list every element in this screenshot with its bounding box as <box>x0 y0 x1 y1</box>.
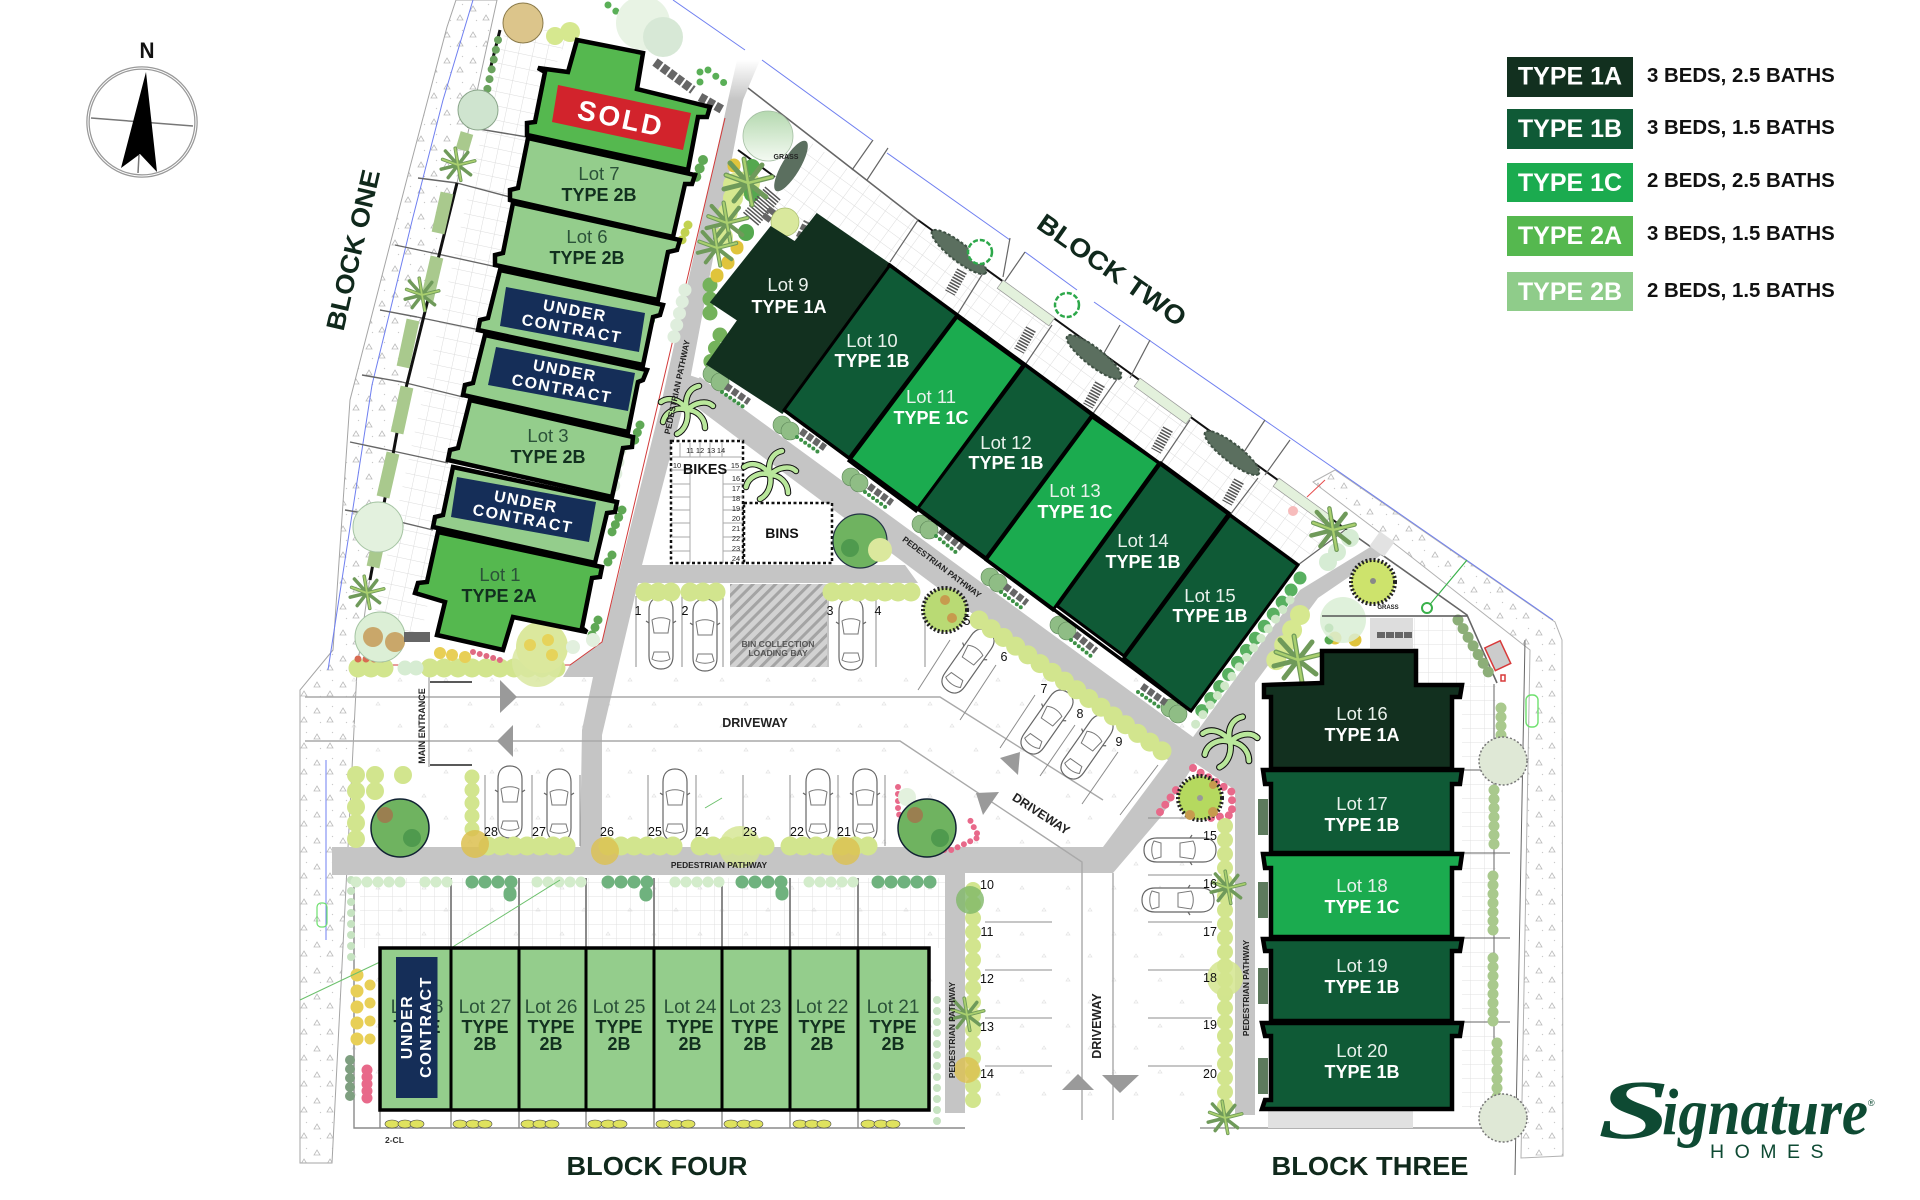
parking numbers: 12 <box>980 972 994 986</box>
pathway and driveway labels: DRIVEWAY <box>722 716 788 730</box>
parking numbers: 7 <box>1041 682 1048 696</box>
parking numbers: 28 <box>484 825 498 839</box>
parking numbers: 24 <box>695 825 709 839</box>
lot 16 <box>1264 651 1462 769</box>
lot 14 <box>1057 463 1229 656</box>
under contract badge: lot 5 <box>500 287 645 352</box>
logo: Signature Homes: ignature <box>1662 1076 1868 1149</box>
pedestrian pathway: connector to block two <box>672 372 704 398</box>
lot labels: block two: TYPE 1C <box>893 408 969 428</box>
lot labels: block four: TYPE <box>461 1017 509 1037</box>
lot labels: block four: 2B <box>743 1034 767 1054</box>
legend: type 2B: TYPE 2B <box>1518 278 1622 306</box>
parking numbers: 27 <box>532 825 546 839</box>
legend: type 1B: 3 BEDS, 1.5 BATHS <box>1647 117 1835 139</box>
pathway and driveway labels: DRIVEWAY <box>1090 993 1104 1059</box>
bin collection loading bay <box>730 584 827 667</box>
block three lots <box>1262 651 1462 1109</box>
pathway and driveway labels: GRASS <box>774 154 799 161</box>
under contract badge: lot 5: UNDER <box>542 297 608 326</box>
lot 9 <box>708 215 888 412</box>
logo: Signature Homes: S <box>1598 1064 1670 1157</box>
block two north wall to path <box>738 150 775 177</box>
legend <box>1507 57 1835 311</box>
parking numbers: 22 <box>790 825 804 839</box>
bikes enclosure: 21 <box>732 524 740 533</box>
lot labels: block two: TYPE 1B <box>834 351 910 371</box>
parking numbers: 10 <box>980 878 994 892</box>
bikes enclosure: 15 <box>731 461 739 470</box>
triangle garden pink border <box>1160 768 1232 818</box>
parking numbers: 25 <box>648 825 662 839</box>
bikes enclosure: 13 <box>707 446 715 455</box>
lot labels: block four <box>391 997 919 1054</box>
lot labels: block four: Lot 28 <box>391 997 443 1018</box>
bikes enclosure: 10 <box>673 461 681 470</box>
parking numbers: 3 <box>827 604 834 618</box>
legend: type 1A <box>1507 57 1835 97</box>
parking numbers: 21 <box>837 825 851 839</box>
red title boundary <box>388 118 725 665</box>
bikes enclosure <box>671 441 743 563</box>
legend: type 2A <box>1507 216 1835 256</box>
block one planter tiles <box>373 133 467 567</box>
pedestrian pathway top fade <box>728 60 760 100</box>
landscaping: palms <box>350 148 1355 1133</box>
lot labels: block three: Lot 19 <box>1336 955 1388 976</box>
lot 2 <box>433 467 617 563</box>
parking numbers: 16 <box>1203 877 1217 891</box>
pathway and driveway labels: MAIN ENTRANCE <box>417 688 427 764</box>
logo: Signature Homes: HOMES <box>1710 1141 1834 1163</box>
bikes enclosure: BIKES <box>683 462 727 478</box>
lot 8 sold <box>527 40 710 170</box>
pathway and driveway labels: PEDESTRIAN PATHWAY <box>947 982 957 1078</box>
lot labels: block four: TYPE <box>666 1017 714 1037</box>
landscaping: block two pale planters <box>997 280 1331 524</box>
bikes enclosure: 14 <box>717 446 725 455</box>
legend: type 1A: TYPE 1A <box>1518 62 1622 90</box>
block two wall north section <box>748 88 1497 683</box>
parking numbers: 6 <box>1001 650 1008 664</box>
block two yard stairs <box>950 271 1239 503</box>
courtyards: block four <box>360 878 945 948</box>
parking numbers: 17 <box>1203 925 1217 939</box>
lot 6 <box>495 203 680 300</box>
lot labels: block three: Lot 20 <box>1336 1040 1388 1061</box>
lot labels: block one: TYPE 2B <box>549 248 625 268</box>
lot 1 <box>415 532 602 650</box>
lot 19 <box>1263 939 1462 1021</box>
lot labels: block two: Lot 11 <box>906 386 956 407</box>
landscaping: feature trees <box>353 0 1527 1142</box>
pedestrian pathway: block one <box>563 100 918 847</box>
bin collection loading bay: LOADING BAY <box>748 648 808 658</box>
block four lots <box>380 948 929 1110</box>
note 2-CL: 2-CL <box>385 1135 404 1145</box>
legend: type 2B <box>1507 272 1835 311</box>
lot labels: block four: TYPE <box>595 1017 643 1037</box>
lot labels: block three: TYPE 1B <box>1324 1062 1400 1082</box>
lot labels: block four: Lot 21 <box>867 997 919 1018</box>
street verge left: gravel strip <box>300 0 497 1163</box>
parking numbers <box>484 604 1217 1081</box>
landscaping: block four bush strip <box>385 1120 900 1128</box>
parking numbers: 19 <box>1203 1018 1217 1032</box>
lot labels: block one: TYPE 2B <box>510 447 586 467</box>
pathway and driveway labels: PEDESTRIAN PATHWAY <box>901 534 984 600</box>
lot 3 <box>448 400 633 497</box>
lot labels: block one: TYPE 2A <box>461 586 537 606</box>
under contract badge: lot 2: UNDER <box>493 488 559 517</box>
lot labels: block three: TYPE 1B <box>1324 977 1400 997</box>
bins enclosure: BINS <box>765 525 799 541</box>
bin collection loading bay: BIN COLLECTION <box>741 639 815 649</box>
parking numbers: 8 <box>1077 707 1084 721</box>
heading: block one: BLOCK ONE <box>320 167 386 333</box>
legend: type 1C: TYPE 1C <box>1518 169 1622 197</box>
lot labels: block four: 2B <box>678 1034 702 1054</box>
bikes enclosure: 24 <box>732 554 740 563</box>
courtyards: block one <box>368 30 570 640</box>
lot labels: block three: TYPE 1C <box>1324 897 1400 917</box>
lot 13 <box>986 417 1159 610</box>
driveway ground texture <box>340 670 1240 1110</box>
bikes enclosure: 11 <box>686 446 694 455</box>
lot labels: block four: Lot 22 <box>796 997 848 1018</box>
street verge right: gravel strip <box>1313 470 1563 1158</box>
under contract badge: lot 4: UNDER <box>532 357 598 386</box>
lot dividers <box>451 948 858 1110</box>
driveway edges <box>305 697 1113 1120</box>
block one lots <box>415 40 710 650</box>
lot labels: block two: Lot 9 <box>767 274 809 295</box>
block three yard fences <box>1200 640 1525 1175</box>
pathway and driveway labels: PEDESTRIAN PATHWAY <box>662 339 692 435</box>
parking numbers: 4 <box>875 604 882 618</box>
under contract badge: lot 28 <box>396 957 438 1098</box>
small green marker left strip <box>317 903 327 927</box>
bikes enclosure: 17 <box>732 484 740 493</box>
lot labels: block three: TYPE 1A <box>1324 725 1400 745</box>
parking numbers: 13 <box>980 1020 994 1034</box>
landscaping: lot 9 yard bins <box>765 207 808 238</box>
bikes enclosure: 16 <box>732 474 740 483</box>
block two lots <box>708 215 1298 711</box>
parking numbers: 1 <box>635 604 642 618</box>
legend: type 1C <box>1507 163 1835 202</box>
legend: type 1A: 3 BEDS, 2.5 BATHS <box>1647 65 1835 87</box>
lot labels: block four: TYPE <box>731 1017 779 1037</box>
block three south strip <box>1268 1110 1413 1128</box>
lot labels: block four: 2B <box>473 1034 497 1054</box>
lot labels: block four: Lot 24 <box>664 997 717 1018</box>
lot labels: block three: TYPE 1B <box>1324 815 1400 835</box>
landscaping: front bins and planters block two <box>703 365 1187 723</box>
bikes enclosure: 20 <box>732 514 740 523</box>
lot 5 <box>478 270 663 365</box>
lot labels: block two: Lot 15 <box>1184 585 1236 606</box>
bins enclosure <box>744 503 832 563</box>
direction arrows <box>497 680 1139 1093</box>
landscaping: hedge rows <box>350 5 1501 1122</box>
block four yard fences <box>354 878 965 1128</box>
lot labels: block four: TYPE <box>527 1017 575 1037</box>
lot labels: block four: 2B <box>810 1034 834 1054</box>
lot labels: block four: TYPE <box>393 1017 441 1037</box>
block one outer wall <box>370 30 500 580</box>
legend: type 2B: 2 BEDS, 1.5 BATHS <box>1647 280 1835 302</box>
heading: block two: BLOCK TWO <box>1032 208 1192 332</box>
small red markers near block three <box>1485 641 1511 681</box>
site boundary: blue lines <box>326 0 1553 940</box>
legend: type 2A: TYPE 2A <box>1518 222 1622 250</box>
landscaping: lot 9 pale shrubs <box>771 208 799 236</box>
landscaping: block two dark hedges <box>927 224 1264 481</box>
parking numbers: 20 <box>1203 1067 1217 1081</box>
bikes enclosure: 19 <box>732 504 740 513</box>
under contract badge: lot 2 <box>451 477 596 542</box>
under contract badge: lot 28: UNDER <box>399 995 416 1059</box>
under contract badge: lot 28: CONTRACT <box>418 976 435 1078</box>
lot labels: block two <box>751 274 1248 626</box>
lot 17 <box>1263 770 1462 853</box>
under contract badge: lot 5: CONTRACT <box>520 312 623 347</box>
lot 20 <box>1262 1023 1462 1109</box>
lot labels: block three: Lot 16 <box>1336 703 1388 724</box>
parking numbers: 14 <box>980 1067 994 1081</box>
sold badge: SOLD <box>575 94 667 143</box>
compass <box>88 38 196 176</box>
pathway and driveway labels: GRASS <box>1377 605 1399 611</box>
parking numbers: 18 <box>1203 971 1217 985</box>
under contract badge: lot 4 <box>488 347 635 411</box>
pathway and driveway labels: PEDESTRIAN PATHWAY <box>1241 940 1251 1036</box>
bikes enclosure: 18 <box>732 494 740 503</box>
lot labels: block one: Lot 6 <box>566 226 608 247</box>
parking numbers: 15 <box>1203 829 1217 843</box>
block one yard fences <box>345 127 527 530</box>
pathway and driveway labels: DRIVEWAY <box>1010 790 1073 838</box>
small green marker right strip <box>1526 695 1538 727</box>
legend: type 1B <box>1507 109 1835 149</box>
lot labels: block four: Lot 25 <box>593 997 645 1018</box>
lot labels: block two: Lot 14 <box>1117 530 1169 551</box>
lot labels: block one: TYPE 2B <box>561 185 637 205</box>
lot 18 <box>1263 854 1462 937</box>
lot labels: block four: Lot 23 <box>729 997 781 1018</box>
pedestrian pathway: block two, block three and block four loop <box>332 377 1384 1115</box>
logo: Signature Homes: ® <box>1868 1098 1875 1108</box>
lot labels: block one: Lot 1 <box>479 564 521 585</box>
lot labels: block two: Lot 10 <box>846 330 898 351</box>
bikes enclosure: 22 <box>732 534 740 543</box>
island garden pink border: east <box>898 787 979 850</box>
lot labels: block two: TYPE 1B <box>968 453 1044 473</box>
parking numbers: 26 <box>600 825 614 839</box>
logo: Signature Homes <box>1598 1064 1875 1163</box>
under contract badge: lot 4: CONTRACT <box>510 372 613 407</box>
landscaping: block two stairs by lot 9 <box>750 193 773 220</box>
courtyards: block two <box>775 138 1343 565</box>
lot labels: block four: 2B <box>607 1034 631 1054</box>
lot labels: block one: Lot 3 <box>527 425 569 446</box>
parking numbers: 23 <box>743 825 757 839</box>
courtyards: block three north <box>1413 618 1493 683</box>
block three west strip bins <box>1258 799 1268 1094</box>
lot 15 <box>1124 515 1298 711</box>
lot labels: block two: Lot 13 <box>1049 480 1101 501</box>
legend: type 1C: 2 BEDS, 2.5 BATHS <box>1647 170 1835 192</box>
lot 7 <box>510 138 695 237</box>
lot 12 <box>918 365 1092 558</box>
lot labels: block two: TYPE 1B <box>1105 552 1181 572</box>
sold badge <box>552 85 691 150</box>
lot labels: block two: TYPE 1A <box>751 297 827 317</box>
block two yard fences <box>852 140 1345 565</box>
parking numbers: 2 <box>682 604 689 618</box>
lot labels: block four: Lot 27 <box>459 997 511 1018</box>
parking numbers: 9 <box>1116 735 1123 749</box>
bikes enclosure: 23 <box>732 544 740 553</box>
pathway and driveway labels: PEDESTRIAN PATHWAY <box>671 860 767 870</box>
legend: type 1B: TYPE 1B <box>1518 115 1622 143</box>
compass: N <box>140 38 154 63</box>
lot labels: block two: TYPE 1C <box>1037 502 1113 522</box>
bikes enclosure: 12 <box>696 446 704 455</box>
lot 10 <box>784 265 957 458</box>
lot labels: block four: TYPE <box>798 1017 846 1037</box>
lot labels: block three: Lot 17 <box>1336 793 1388 814</box>
courtyards: block three <box>1462 684 1496 1108</box>
lot 11 <box>849 317 1023 511</box>
landscaping: block one north grey blocks <box>655 62 723 110</box>
heading: block three: BLOCK THREE <box>1272 1151 1468 1181</box>
lot labels: block four: TYPE <box>869 1017 917 1037</box>
parking numbers: 11 <box>981 925 994 939</box>
landscaping: north yard hedge by block two <box>768 137 814 195</box>
block two front wall <box>784 264 1298 711</box>
lot labels: block four: 2B <box>539 1034 563 1054</box>
lot labels: block three: Lot 18 <box>1336 875 1388 896</box>
lot labels: block three <box>1324 703 1400 1082</box>
pathway and driveway labels <box>417 154 1399 1078</box>
lot labels: block two: TYPE 1B <box>1172 606 1248 626</box>
green survey line <box>300 798 722 1000</box>
cars: parking <box>495 597 1216 915</box>
parking numbers: 5 <box>964 614 971 628</box>
heading: block four: BLOCK FOUR <box>566 1151 748 1181</box>
under contract badge: lot 2: CONTRACT <box>471 502 574 537</box>
parking bay lines <box>429 596 1212 1066</box>
lot 4 <box>463 335 647 432</box>
lots 21 to 28 fill <box>380 948 929 1110</box>
lot labels: block one <box>461 163 637 606</box>
lot labels: block one: Lot 7 <box>578 163 620 184</box>
lot labels: block four: Lot 26 <box>525 997 577 1018</box>
legend: type 2A: 3 BEDS, 1.5 BATHS <box>1647 223 1835 245</box>
block two boundary wall <box>918 220 1347 530</box>
lot labels: block four: 2B <box>881 1034 905 1054</box>
lot labels: block two: Lot 12 <box>980 432 1032 453</box>
